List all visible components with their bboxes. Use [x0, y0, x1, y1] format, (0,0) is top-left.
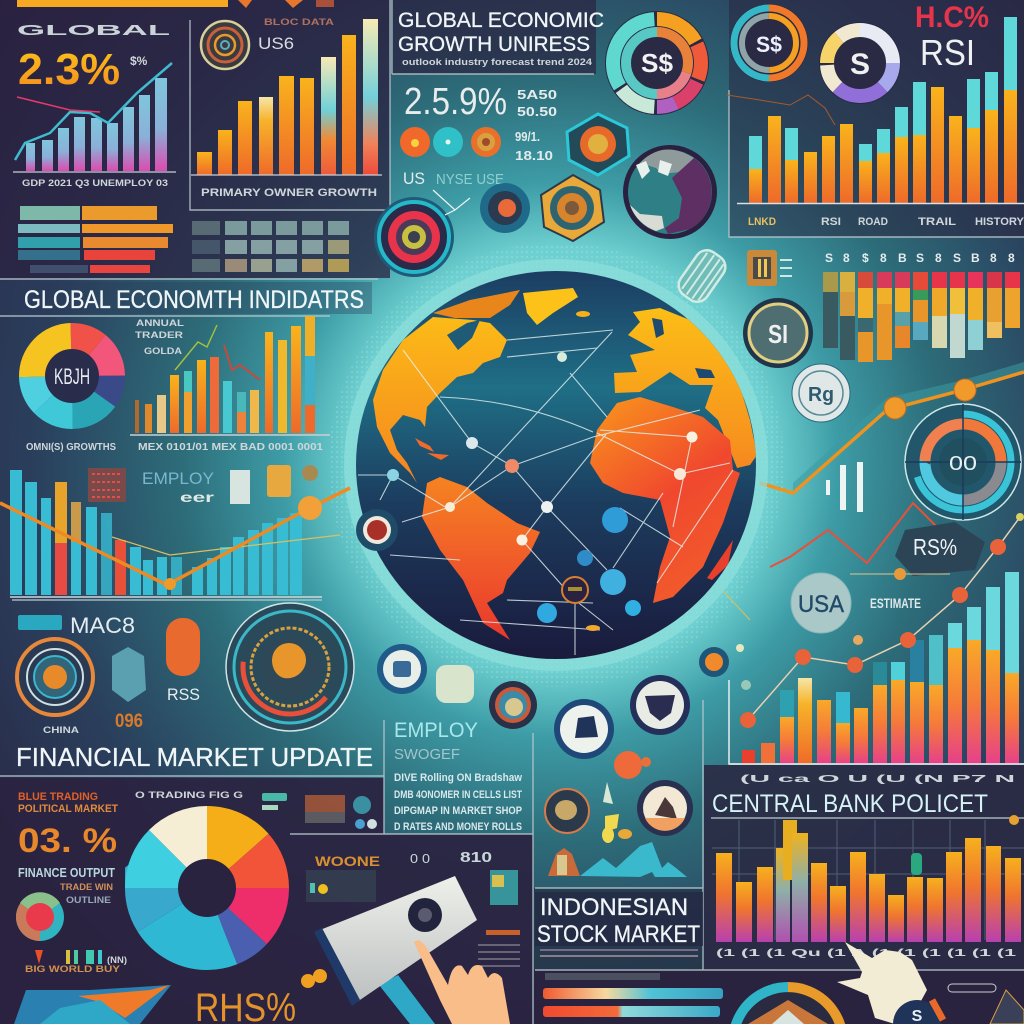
heading line two: GROWTH UNIRESS [398, 33, 590, 56]
pointing hand [414, 940, 510, 1024]
donut: pale purple [819, 22, 901, 104]
heading line one: INDONESIAN [540, 894, 688, 921]
stat: 2.5.9% [404, 81, 507, 123]
heading backdrop [0, 282, 372, 314]
panel: 2.5.9 stat [400, 81, 557, 188]
heading backdrop [535, 892, 703, 946]
header glyphs: 8 [935, 251, 942, 265]
table: colour matrix [823, 251, 1020, 362]
line chart: orange trend [760, 362, 1024, 493]
chart caption: MEX 0101/01 MEX BAD 0001 0001 [138, 442, 323, 453]
icon: multicolor coin [489, 681, 537, 729]
mini legend row: (NN) [107, 955, 127, 965]
header glyphs: 8 [880, 251, 887, 265]
stat: rate: H.C% [915, 1, 989, 34]
heading: global: GLOBAL [17, 22, 170, 39]
icon: blue coin [377, 644, 427, 694]
label: RSI: RSI [920, 32, 975, 73]
lens [408, 898, 442, 932]
megaphone labels: 810 [460, 849, 492, 866]
gauge: radial indicator [905, 404, 1021, 520]
madagascar [707, 540, 733, 580]
icon: white coin with shield [630, 675, 690, 735]
donut: teal and orange segments [605, 11, 709, 115]
donut: ring with S [730, 4, 808, 82]
heading: CENTRAL BANK POLICET [712, 790, 988, 818]
subheading: SWOGEF [394, 746, 460, 763]
mini icons: employ row [88, 465, 318, 505]
caption rows: FINANCE OUTPUT [18, 865, 115, 880]
bar chart: teal with orange trend [0, 470, 350, 597]
panel: global headline [13, 22, 176, 188]
caption: CHINA [43, 725, 80, 735]
caption rows: OUTLINE [66, 895, 111, 905]
ornament bottom right [932, 984, 1024, 1024]
small icons around [699, 590, 863, 690]
label: 096: 096 [115, 711, 143, 732]
icon: coin SI [743, 298, 813, 368]
label: employ: EMPLOY [142, 469, 214, 488]
icon: small globe [623, 145, 717, 239]
nodes [387, 352, 698, 631]
north america [373, 317, 507, 483]
body text [394, 772, 522, 833]
header glyphs: 8 [1008, 251, 1015, 265]
megaphone with hand [301, 876, 510, 1024]
arctic islands [433, 290, 520, 318]
gauge label: 00 [949, 453, 977, 475]
panel: indonesian stock market [535, 892, 703, 957]
axis labels: (1 (1 (1 Qu (1 A (1 (1 (1 (1 (1 (1 [716, 948, 1017, 959]
icon: cream pill [436, 665, 474, 703]
greenland [523, 288, 578, 325]
badge: USA: USA [798, 591, 844, 618]
globe [344, 259, 768, 671]
heading: GLOBAL ECONOMIC [398, 9, 604, 32]
label rows: POLITICAL MARKET [18, 803, 118, 815]
bar chart: stacked teal and orange [727, 17, 1024, 204]
stat: 03. % [18, 822, 117, 860]
gauge: large ring [224, 601, 356, 733]
icon: coin SI: SI [768, 319, 788, 349]
swatch: MAC [18, 615, 62, 630]
ring label: S$ [756, 32, 782, 57]
panel label: top: BLOC DATA [264, 17, 335, 27]
body text: D RATES AND MONEY ROLLS [394, 821, 522, 833]
stat: 2.3 percent: 2.3% [18, 45, 120, 94]
subtitle: outlook industry forecast trend 2024 [402, 57, 592, 67]
sub rules [540, 949, 698, 957]
continents [358, 288, 757, 655]
chart labels: TRADER [135, 330, 184, 340]
bars [130, 316, 330, 435]
badge: USA [791, 573, 851, 633]
body text: DMB 4ONOMER IN CELLS LIST [394, 789, 522, 801]
small labels: US [403, 169, 425, 188]
icon: white coin: Rg [808, 384, 834, 406]
icon: gold chart box [747, 250, 792, 286]
chart axis labels: ROAD [858, 216, 888, 228]
pie label: KBJH [54, 364, 90, 389]
icon: spiral coin [201, 21, 249, 69]
icon: orange blob [614, 751, 651, 779]
label rows [18, 790, 243, 815]
stat rows: 99/1. [515, 129, 540, 144]
pie chart: market [166, 847, 248, 929]
megaphone labels: WOONE [315, 853, 380, 869]
data table [192, 221, 349, 272]
label: US6: US6 [258, 34, 294, 53]
icon: white coin with wedge [554, 699, 614, 759]
panel: global economic growth [398, 9, 604, 67]
caribbean [415, 438, 449, 460]
chart axis labels: RSI [821, 216, 841, 228]
panel: financial pie block [16, 790, 520, 974]
chart labels: ANNUAL [136, 318, 185, 328]
icon row [400, 127, 501, 157]
icon: teal mountains [580, 842, 687, 877]
mini donut [16, 892, 64, 941]
globe marker [356, 509, 398, 551]
icon: pointing hand right [837, 942, 941, 1024]
megaphone labels: 0 0 [410, 851, 430, 866]
label: RSS: RSS [167, 685, 200, 704]
label rows: O TRADING FIG G [135, 790, 243, 800]
orange buttons [301, 969, 327, 988]
header glyphs: S [953, 251, 961, 265]
rim [314, 928, 360, 1006]
mini icons: employ row: eer [180, 489, 215, 505]
marker [1009, 815, 1019, 825]
horizontal bars [18, 206, 173, 273]
chart caption: PRIMARY OWNER GROWTH [201, 187, 377, 199]
side labels: $% [130, 54, 148, 68]
header glyphs: $ [862, 251, 869, 265]
header glyphs: 8 [843, 251, 850, 265]
stat rows: 50.50 [517, 104, 557, 119]
chart labels [135, 318, 185, 356]
header glyphs: S [916, 251, 924, 265]
header glyphs: B [971, 251, 980, 265]
slider marker [850, 568, 950, 580]
S label: S [850, 48, 870, 81]
chart labels: GOLDA [144, 346, 183, 356]
gauge: half dial bottom [731, 982, 845, 1024]
label: estimate: ESTIMATE [870, 595, 921, 611]
axis labels: (U ca O U (U (N P7 N [740, 774, 1015, 785]
mini legend row: BIG WORLD BUY [25, 964, 120, 974]
pie caption: OMNI(S) GROWTHS [26, 442, 116, 453]
body [320, 876, 477, 1002]
chart axis labels: LNKD [748, 216, 776, 228]
small caption: NYSE USE [436, 171, 504, 188]
heading: EMPLOY [394, 719, 478, 742]
icon: roof graphic [14, 985, 171, 1024]
chart axis labels: TRAIL [918, 216, 956, 228]
header glyphs: S [825, 251, 833, 265]
panel: global indicators heading [0, 282, 372, 314]
bar chart: indicators [130, 316, 330, 435]
stat rows [515, 87, 557, 163]
orange trend line [0, 488, 350, 590]
heading line two: STOCK MARKET [537, 921, 700, 948]
eurasia [614, 308, 757, 468]
donut label: S$ [641, 48, 674, 78]
icon: orange capsule [166, 618, 200, 676]
icon: white coin [792, 364, 850, 422]
white bars [826, 462, 863, 512]
header glyphs: 8 [990, 251, 997, 265]
pie chart: indicators [45, 349, 99, 403]
icon: striped badge [674, 246, 730, 306]
body text: DIVE Rolling ON Bradshaw [394, 772, 522, 784]
stat rows: 5A50 [517, 87, 557, 102]
chart axis labels: HISTORY [975, 216, 1024, 228]
label rows: BLUE TRADING [18, 791, 98, 803]
icon: connector [433, 190, 470, 215]
icon: dark coin [545, 789, 589, 833]
panel: employ text [394, 719, 522, 833]
icon: teal hexagon coin [567, 114, 629, 175]
bars [716, 820, 1021, 942]
top strip [17, 0, 334, 8]
small icons [262, 793, 377, 829]
icon: lamp [548, 848, 580, 876]
area chart: growth [13, 63, 176, 172]
halo ring [344, 259, 768, 671]
icon: gold hexagon coin [541, 175, 604, 241]
axis labels: GDP 2021 Q3 UNEMPLOY 03 [22, 178, 168, 188]
caption rows [18, 865, 115, 905]
columns [823, 272, 1020, 362]
gauge: left ring [17, 639, 93, 715]
icon: small target [480, 183, 530, 233]
small scene [306, 870, 520, 966]
header glyphs: B [898, 251, 907, 265]
chart axis labels [748, 216, 1024, 228]
south america [422, 477, 540, 640]
callout: RS%: RS% [913, 534, 957, 560]
header glyphs [825, 251, 1015, 265]
megaphone labels [315, 849, 492, 869]
icon: yellow shapes [602, 782, 632, 843]
inland seas [652, 318, 715, 378]
line chart: red zigzag [770, 503, 943, 567]
iceland [576, 311, 590, 317]
heading: GLOBAL ECONOMTH INDIDATRS [24, 286, 364, 314]
callout: RS% [895, 522, 985, 576]
africa [590, 397, 740, 603]
network lines [358, 330, 733, 655]
trend line with nodes [740, 513, 1024, 728]
icon: teal gem [112, 647, 146, 702]
heading: financial market update: FINANCIAL MARKET UPDATE [16, 742, 373, 772]
progress bars [543, 973, 723, 1017]
caption rows: TRADE WIN [60, 882, 113, 892]
panel: central bank policy [712, 790, 1024, 959]
label: MAC8: MAC8 [70, 613, 135, 638]
mini legend row [25, 950, 127, 974]
handle [379, 975, 435, 1024]
grid [712, 820, 1024, 940]
hudson bay [447, 320, 480, 350]
icons above employ [377, 644, 693, 877]
body text: DIPGMAP IN MARKET SHOP [394, 805, 522, 817]
bar chart: rising bars [191, 19, 382, 175]
bar chart: rising orange and teal [729, 513, 1024, 764]
icon: cream coin [637, 780, 693, 836]
icon: target ring [374, 197, 454, 277]
sphere [356, 271, 756, 659]
stat rows: 18.10 [515, 148, 553, 163]
